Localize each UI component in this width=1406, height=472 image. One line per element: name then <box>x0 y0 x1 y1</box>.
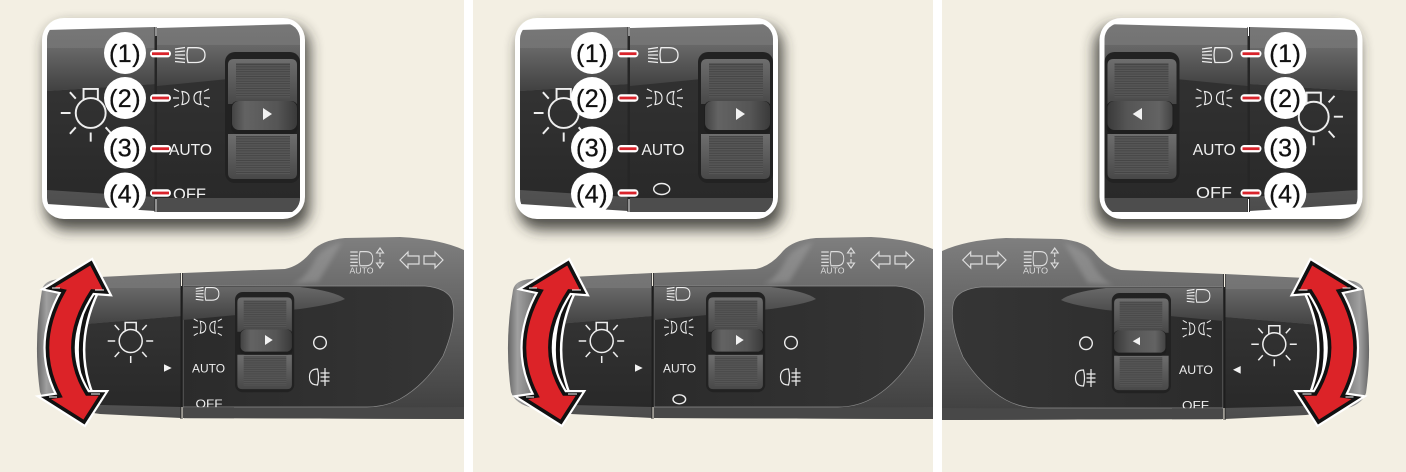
icon: high beam <box>175 48 205 62</box>
icon: low beam <box>173 89 210 107</box>
marker 2: (2) <box>109 85 141 113</box>
icon: switch pointer <box>736 335 744 345</box>
icon: ring position <box>673 395 686 404</box>
marker 2: (2) <box>1269 85 1301 113</box>
triangle on switch <box>1133 108 1142 120</box>
icon: ring <box>1080 337 1092 350</box>
panel 1: switch detail inset with OFF position <box>42 18 310 230</box>
icon: turn right arrow <box>895 252 914 268</box>
icon: beam control with AUTO: AUTO <box>1023 266 1048 276</box>
marker 1: (1) <box>109 40 141 68</box>
marker 3 <box>104 126 171 168</box>
icon: headlamp bulb on knob <box>1251 326 1297 366</box>
marker 4: (4) <box>1269 180 1301 208</box>
marker 3: (3) <box>1269 134 1301 162</box>
icon: headlamp bulb on knob <box>579 322 624 363</box>
panel 1: lighting stalk illustration <box>37 237 464 422</box>
cut band over OFF label <box>157 198 225 212</box>
label: OFF: OFF <box>1196 185 1232 202</box>
marker 2 <box>1240 77 1306 119</box>
icon: headlamp bulb <box>534 89 593 142</box>
icon: beam control with AUTO <box>1023 248 1058 276</box>
icon: beam control with AUTO: AUTO <box>350 266 374 276</box>
icon: turn left arrow <box>871 252 890 268</box>
icon: headlamp bulb <box>1284 93 1343 145</box>
label: AUTO: AUTO <box>642 142 684 159</box>
icon: high beam <box>1187 289 1210 302</box>
label: AUTO: AUTO <box>663 362 696 376</box>
marker 3 <box>571 126 638 168</box>
marker 2 <box>571 77 638 119</box>
panel 3: mirrored switch detail inset <box>1094 18 1362 230</box>
arrow: rotate knob <box>46 263 106 422</box>
icon: high beam <box>667 287 690 300</box>
icon: knob pointer <box>635 364 643 372</box>
icon: high beam <box>196 287 219 300</box>
cut band over OFF label <box>1172 408 1222 419</box>
panel 2: lighting stalk illustration <box>508 237 935 422</box>
icon: ring <box>314 336 326 349</box>
icon: knob pointer <box>164 364 172 372</box>
panel: right position background <box>942 0 1406 472</box>
icon: headlamp bulb <box>61 89 120 142</box>
icon: high beam <box>648 48 678 62</box>
arrow: rotate knob <box>1296 263 1356 422</box>
marker 3 <box>1240 126 1306 168</box>
marker 1: (1) <box>576 40 608 68</box>
icon: fog lamp <box>1076 369 1096 387</box>
icon: headlamp bulb on knob <box>108 322 153 363</box>
icon: turn right arrow <box>987 252 1006 268</box>
marker 4 <box>1240 172 1306 210</box>
arrow: rotate knob <box>523 263 583 422</box>
marker 1 <box>1240 32 1306 74</box>
marker 2: (2) <box>576 85 608 113</box>
icon: knob pointer <box>1233 366 1241 374</box>
marker 1: (1) <box>1269 40 1301 68</box>
marker 4 <box>571 172 638 210</box>
label: AUTO: AUTO <box>1179 363 1213 377</box>
icon: low beam <box>1196 89 1232 107</box>
icon: low beam <box>1182 320 1212 337</box>
icon: fog lamp <box>780 368 800 386</box>
icon: low beam <box>193 319 223 335</box>
icon: switch pointer <box>1133 337 1140 345</box>
panel: middle position background <box>473 0 933 472</box>
icon: turn right arrow <box>424 252 443 268</box>
marker 3: (3) <box>109 134 141 162</box>
marker 4: (4) <box>576 180 608 208</box>
marker 1 <box>104 32 171 74</box>
icon: turn left arrow <box>963 252 982 268</box>
icon: beam control with AUTO: AUTO <box>820 266 844 276</box>
marker 4: (4) <box>109 180 141 208</box>
label: AUTO: AUTO <box>192 362 225 376</box>
cut band over OFF label <box>184 407 234 418</box>
marker 3: (3) <box>576 134 608 162</box>
marker 1 <box>571 32 638 74</box>
icon: switch pointer <box>265 335 273 345</box>
icon: beam control with AUTO <box>820 248 854 276</box>
icon: ring <box>654 184 670 194</box>
icon: high beam <box>1202 48 1232 62</box>
label: AUTO: AUTO <box>1193 142 1236 159</box>
icon: low beam <box>646 89 683 107</box>
marker 4 <box>104 172 171 210</box>
icon: low beam <box>664 319 694 335</box>
icon: ring <box>785 336 797 349</box>
triangle on switch <box>263 108 272 120</box>
icon: beam control with AUTO <box>350 248 384 276</box>
label: OFF: OFF <box>173 186 206 204</box>
panel: left position background <box>0 0 464 472</box>
label: AUTO: AUTO <box>169 142 212 159</box>
label: OFF: OFF <box>1182 398 1209 412</box>
icon: fog lamp <box>310 368 330 386</box>
icon: turn left arrow <box>400 252 419 268</box>
panel 2: switch detail inset with ring position <box>515 18 783 230</box>
triangle on switch <box>736 108 745 120</box>
label: OFF: OFF <box>196 397 222 411</box>
marker 2 <box>104 77 171 119</box>
panel 3: mirrored lighting stalk illustration <box>942 238 1369 422</box>
